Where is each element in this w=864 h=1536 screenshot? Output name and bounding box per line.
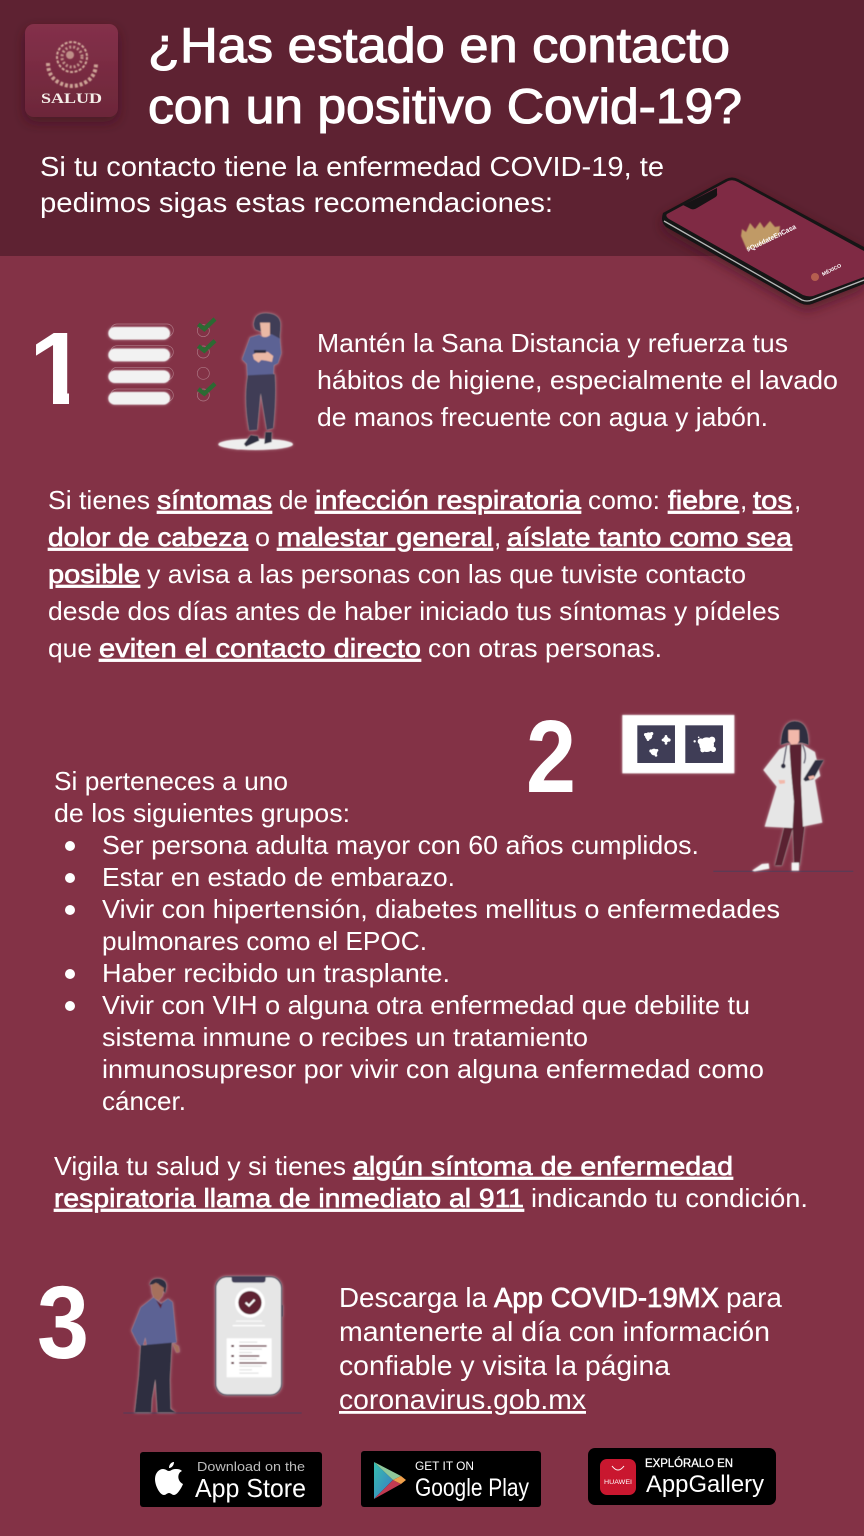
number 3: 3	[37, 1265, 89, 1380]
badge: app store: Download on the	[197, 1460, 305, 1474]
badge: google play	[361, 1451, 541, 1507]
title: con un positivo Covid-19?	[148, 80, 742, 134]
step 3 text: para	[726, 1282, 782, 1313]
bullet list: sistema inmune o recibes un tratamiento	[102, 1022, 588, 1052]
icon: woman with phone	[218, 313, 293, 450]
bullet list: cáncer.	[102, 1086, 186, 1116]
text block: symptoms: malestar general	[277, 522, 493, 552]
intro text	[40, 151, 664, 218]
panel: header	[0, 0, 864, 256]
number 2: 2	[526, 699, 576, 814]
badge: app store	[140, 1452, 322, 1507]
icon: doctor	[713, 721, 853, 872]
badge: appgallery	[588, 1448, 776, 1505]
text block: symptoms: aíslate tanto como sea	[507, 522, 793, 552]
text block: 911: Vigila tu salud y si tienes	[54, 1151, 346, 1181]
text block: symptoms: eviten el contacto directo	[99, 633, 421, 663]
badge: appgallery: AppGallery	[646, 1471, 764, 1498]
intro text: pedimos sigas estas recomendaciones:	[40, 187, 553, 218]
icon: play triangle	[374, 1462, 406, 1499]
text block: symptoms: ,	[794, 485, 801, 515]
icon: salud logo: SALUD	[41, 91, 102, 107]
icon: apple	[155, 1462, 183, 1495]
icon: huawei: HUAWEI	[604, 1479, 632, 1486]
bullet list: Vivir con VIH o alguna otra enfermedad que debilite tu	[102, 990, 750, 1020]
text block: symptoms: Si tienes	[48, 485, 150, 515]
text block: symptoms: o	[255, 522, 270, 552]
step 3 text	[339, 1282, 782, 1415]
icon: salud logo	[25, 24, 118, 117]
text block: symptoms: síntomas	[157, 485, 272, 515]
step 3 text: App COVID-19MX	[494, 1282, 719, 1313]
step 3 text: coronavirus.gob.mx	[339, 1384, 586, 1415]
bullet list: Estar en estado de embarazo.	[102, 862, 455, 892]
step 3 text: Descarga la	[339, 1282, 487, 1313]
text block: 911: indicando tu condición.	[531, 1183, 808, 1213]
text block: symptoms: que	[48, 633, 92, 663]
badge: appgallery: EXPLÓRALO EN	[645, 1457, 733, 1470]
text block: symptoms: fiebre	[668, 485, 739, 515]
text block: symptoms: como:	[588, 485, 660, 515]
text block: symptoms: infección respiratoria	[315, 485, 582, 515]
step 1 text: hábitos de higiene, especialmente el lavado	[317, 365, 838, 395]
icon: x-ray panel	[622, 715, 734, 773]
text block: symptoms: ,	[740, 485, 747, 515]
bullet list: pulmonares como el EPOC.	[102, 926, 427, 956]
text block: symptoms	[48, 485, 801, 663]
text block: symptoms: tos	[753, 485, 792, 515]
bullet list: inmunosupresor por vivir con alguna enfermedad como	[102, 1054, 764, 1084]
text block: symptoms: con otras personas.	[428, 633, 662, 663]
text block: symptoms: dolor de cabeza	[48, 522, 249, 552]
text block: symptoms: de	[279, 485, 308, 515]
panel: step 3	[37, 1265, 782, 1415]
number 1: 1	[29, 311, 86, 426]
badge: google play: GET IT ON	[415, 1461, 474, 1473]
icon: checklist	[108, 319, 215, 405]
text block: symptoms: posible	[48, 559, 140, 589]
intro text: Si tu contacto tiene la enfermedad COVID-19, te	[40, 151, 664, 182]
text block: symptoms: desde dos días antes de haber iniciado tus síntomas y pídeles	[48, 596, 780, 626]
icon: smartphone: MÉXICO	[820, 261, 843, 278]
text block: 911	[54, 1151, 808, 1213]
step 1 text	[317, 328, 838, 432]
text block: symptoms: ,	[494, 522, 501, 552]
icon: smartphone: #QuédateEnCasa	[746, 224, 797, 254]
icon: smartphone	[662, 178, 864, 305]
icon: huawei	[600, 1459, 636, 1495]
step 1 text: Mantén la Sana Distancia y refuerza tus	[317, 328, 788, 358]
badge: google play: Google Play	[415, 1474, 529, 1502]
text block: 911: respiratoria llama de inmediato al 911	[54, 1183, 524, 1213]
panel: step 2	[54, 699, 853, 1213]
step 3 text: mantenerte al día con información	[339, 1316, 770, 1347]
step 1 text: de manos frecuente con agua y jabón.	[317, 402, 768, 432]
icon: man with phone	[123, 1277, 302, 1414]
bullet list	[65, 830, 780, 1116]
badge: app store: App Store	[195, 1473, 306, 1503]
bullet list: Haber recibido un trasplante.	[102, 958, 450, 988]
bullet list: Vivir con hipertensión, diabetes mellitus o enfermedades	[102, 894, 780, 924]
text block: symptoms: y avisa a las personas con las que tuviste contacto	[147, 559, 746, 589]
group intro: Si perteneces a uno	[54, 766, 288, 796]
group intro	[54, 766, 350, 828]
panel: step 1	[29, 311, 838, 450]
bullet list: Ser persona adulta mayor con 60 años cumplidos.	[102, 830, 699, 860]
step 3 text: confiable y visita la página	[339, 1350, 670, 1381]
title: ¿Has estado en contacto	[148, 19, 730, 73]
title	[148, 19, 742, 134]
text block: 911: algún síntoma de enfermedad	[353, 1151, 733, 1181]
group intro: de los siguientes grupos:	[54, 798, 350, 828]
